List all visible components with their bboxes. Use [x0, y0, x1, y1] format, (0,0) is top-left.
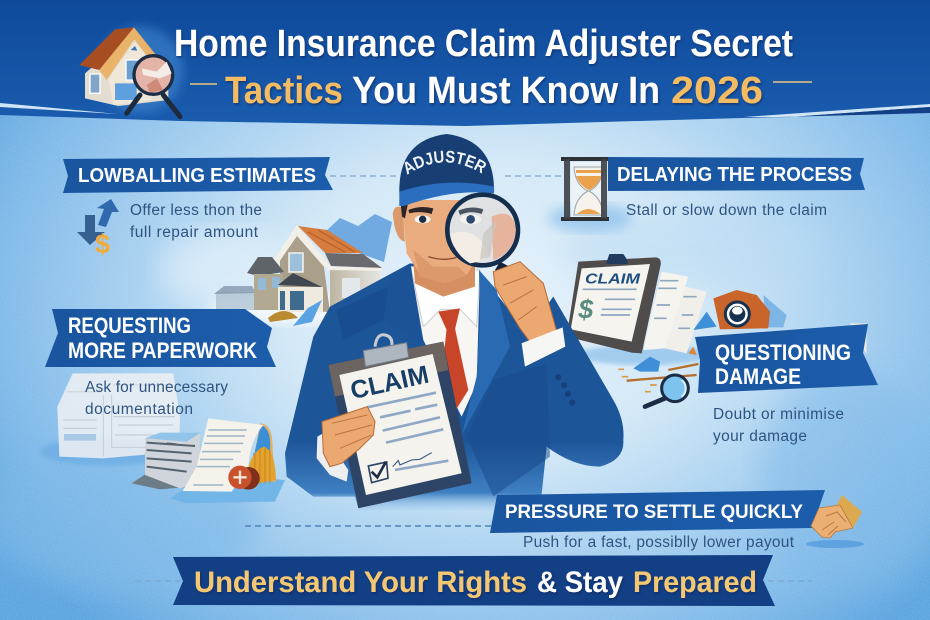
hand holding clipboard	[317, 407, 375, 482]
cap label: ADJUSTER	[404, 150, 486, 175]
description: Doubt or minimise	[713, 406, 844, 423]
shirt and tie	[411, 267, 480, 417]
illustration: paperwork pile	[40, 373, 285, 503]
banner: MORE PAPERWORK	[68, 338, 257, 363]
description: Ask for unnecessary	[85, 379, 228, 396]
title	[174, 23, 793, 112]
panel: lowballing estimates	[63, 157, 333, 259]
lapels	[383, 263, 510, 435]
banner: DAMAGE	[715, 364, 801, 389]
connector dashes	[135, 176, 812, 581]
footer banner: Understand Your Rights	[194, 566, 527, 599]
cap	[399, 134, 494, 206]
banner: LOWBALLING ESTIMATES	[78, 165, 316, 187]
panel: requesting more paperwork	[45, 309, 276, 418]
icon: handshake	[806, 495, 864, 548]
panel: delaying the process	[548, 157, 865, 232]
banner: PRESSURE TO SETTLE QUICKLY	[505, 501, 803, 523]
description: Push for a fast, possiblly lower payout	[523, 534, 795, 551]
magnifying glass	[447, 195, 518, 275]
footer banner	[173, 555, 775, 606]
description: full repair amount	[130, 224, 259, 241]
clipboard	[328, 335, 472, 508]
title: 2026	[671, 70, 763, 112]
banner: REQUESTING	[68, 313, 191, 338]
description: your damage	[713, 428, 807, 445]
title: Tactics	[225, 70, 343, 112]
description: Offer less thon the	[130, 202, 262, 219]
banner	[490, 490, 825, 533]
illustration: damaged house	[210, 214, 392, 326]
illustration: claim clipboard and papers: CLAIM	[585, 271, 641, 287]
head	[393, 200, 483, 297]
hand holding magnifier	[493, 262, 565, 367]
description: documentation	[85, 401, 193, 418]
title: Home Insurance Claim Adjuster Secret	[174, 23, 793, 65]
icon: arrows and dollar: $	[95, 229, 110, 259]
illustration: claim clipboard and papers	[567, 254, 867, 407]
footer banner: Prepared	[633, 566, 757, 599]
title: You Must Know In	[352, 70, 660, 112]
panel: pressure to settle quickly	[490, 490, 864, 551]
icon: house with magnifying glass	[79, 27, 183, 117]
banner: DELAYING THE PROCESS	[617, 164, 852, 186]
banner	[608, 157, 865, 191]
banner	[695, 324, 878, 393]
description: Stall or slow down the claim	[626, 202, 827, 219]
icon: hourglass	[548, 157, 632, 232]
illustration: claim clipboard and papers: $	[577, 294, 594, 324]
footer banner: & Stay	[537, 566, 623, 599]
banner	[45, 309, 276, 367]
illustration: adjuster figure	[285, 134, 624, 510]
header band	[0, 0, 930, 126]
jacket	[285, 263, 624, 510]
icon: arrows and dollar	[77, 199, 119, 259]
panel: questioning damage	[695, 324, 878, 445]
banner	[63, 157, 333, 193]
banner: QUESTIONING	[715, 340, 851, 365]
clipboard: CLAIM	[348, 361, 431, 405]
